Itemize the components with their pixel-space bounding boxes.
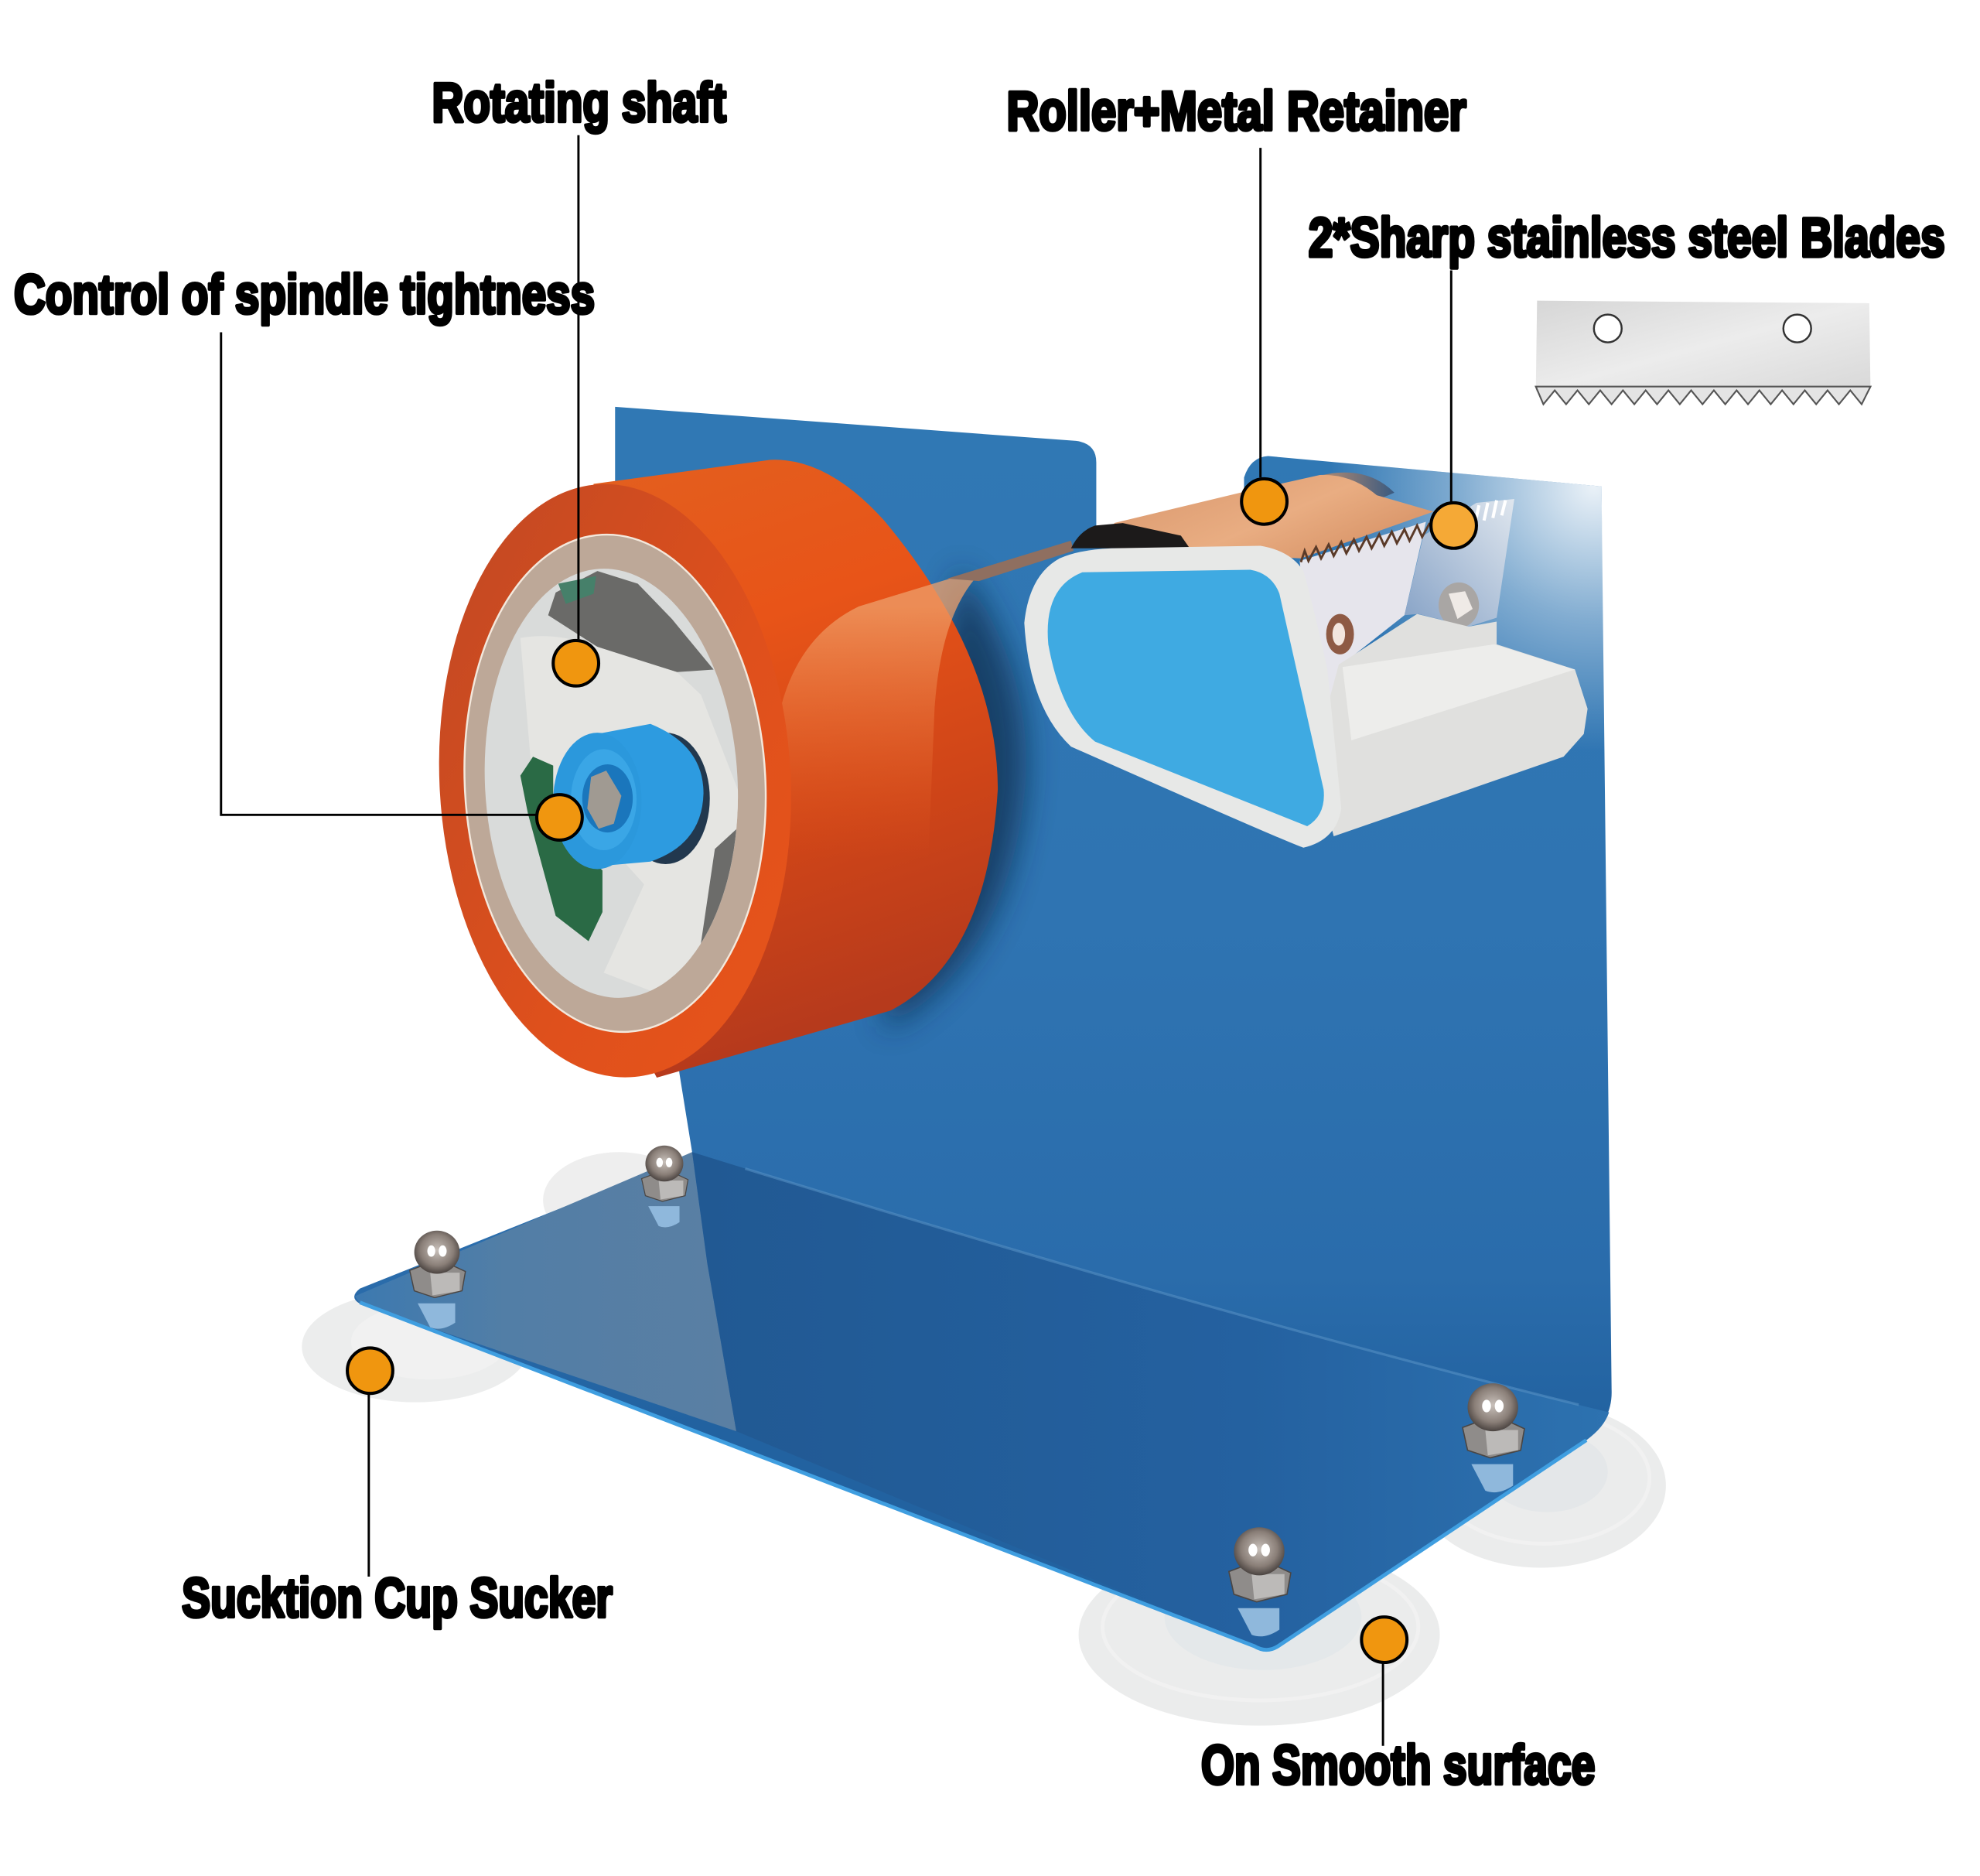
white block — [1313, 614, 1588, 836]
base main — [692, 1152, 1609, 1650]
teeth — [1301, 523, 1430, 562]
label: control of spindle tightness: Control of spindle tightness — [14, 264, 595, 326]
label: suction cup: Sucktion Cup Sucker — [182, 1567, 613, 1629]
leader line: spindle tightness — [221, 332, 538, 815]
white frame — [1024, 545, 1341, 848]
tape face — [424, 475, 806, 1086]
marker dots — [347, 479, 1476, 1662]
leader line: suction cup — [368, 1393, 370, 1577]
tape tail sheet — [773, 575, 975, 859]
top right fade — [1268, 456, 1606, 808]
blue bent metal stand — [354, 407, 1612, 1650]
metal guard blade — [1405, 499, 1514, 627]
cutter head — [1024, 473, 1588, 848]
cardboard core — [452, 527, 778, 1040]
base reflection — [355, 1152, 736, 1431]
tape shadow — [884, 569, 1026, 1030]
black rubber tip — [1071, 523, 1190, 548]
hub opening — [484, 569, 738, 998]
blade close-up — [1536, 301, 1870, 405]
blue knob — [553, 724, 710, 870]
cap nuts — [410, 1146, 1524, 1636]
crease — [745, 1169, 1579, 1405]
lower edge highlight — [360, 1303, 1586, 1650]
cutting body — [1299, 521, 1426, 808]
tape roll — [424, 460, 1074, 1086]
blue inset — [1048, 569, 1324, 826]
label: smooth surface: On Smooth surface — [1201, 1734, 1595, 1796]
leader line: roller — [1260, 148, 1261, 477]
roller — [1313, 473, 1395, 501]
leader line: blades — [1450, 270, 1452, 503]
guard teeth — [1475, 501, 1505, 523]
tape body — [556, 460, 998, 1078]
label: roller and metal retainer: Roller+Metal Retainer — [1006, 80, 1466, 142]
tape strip — [947, 541, 1074, 581]
leader line: rotating shaft — [578, 135, 579, 639]
leader line: smooth surface — [1382, 1662, 1384, 1746]
green spool — [521, 757, 603, 941]
label: rotating shaft: Rotating shaft — [432, 72, 726, 134]
suction cups — [302, 1152, 1666, 1726]
white spoke — [521, 636, 745, 998]
lower dark sliver — [701, 829, 736, 944]
screws — [1326, 583, 1479, 654]
tape on roller — [1114, 475, 1433, 559]
dark wedge — [548, 571, 714, 672]
